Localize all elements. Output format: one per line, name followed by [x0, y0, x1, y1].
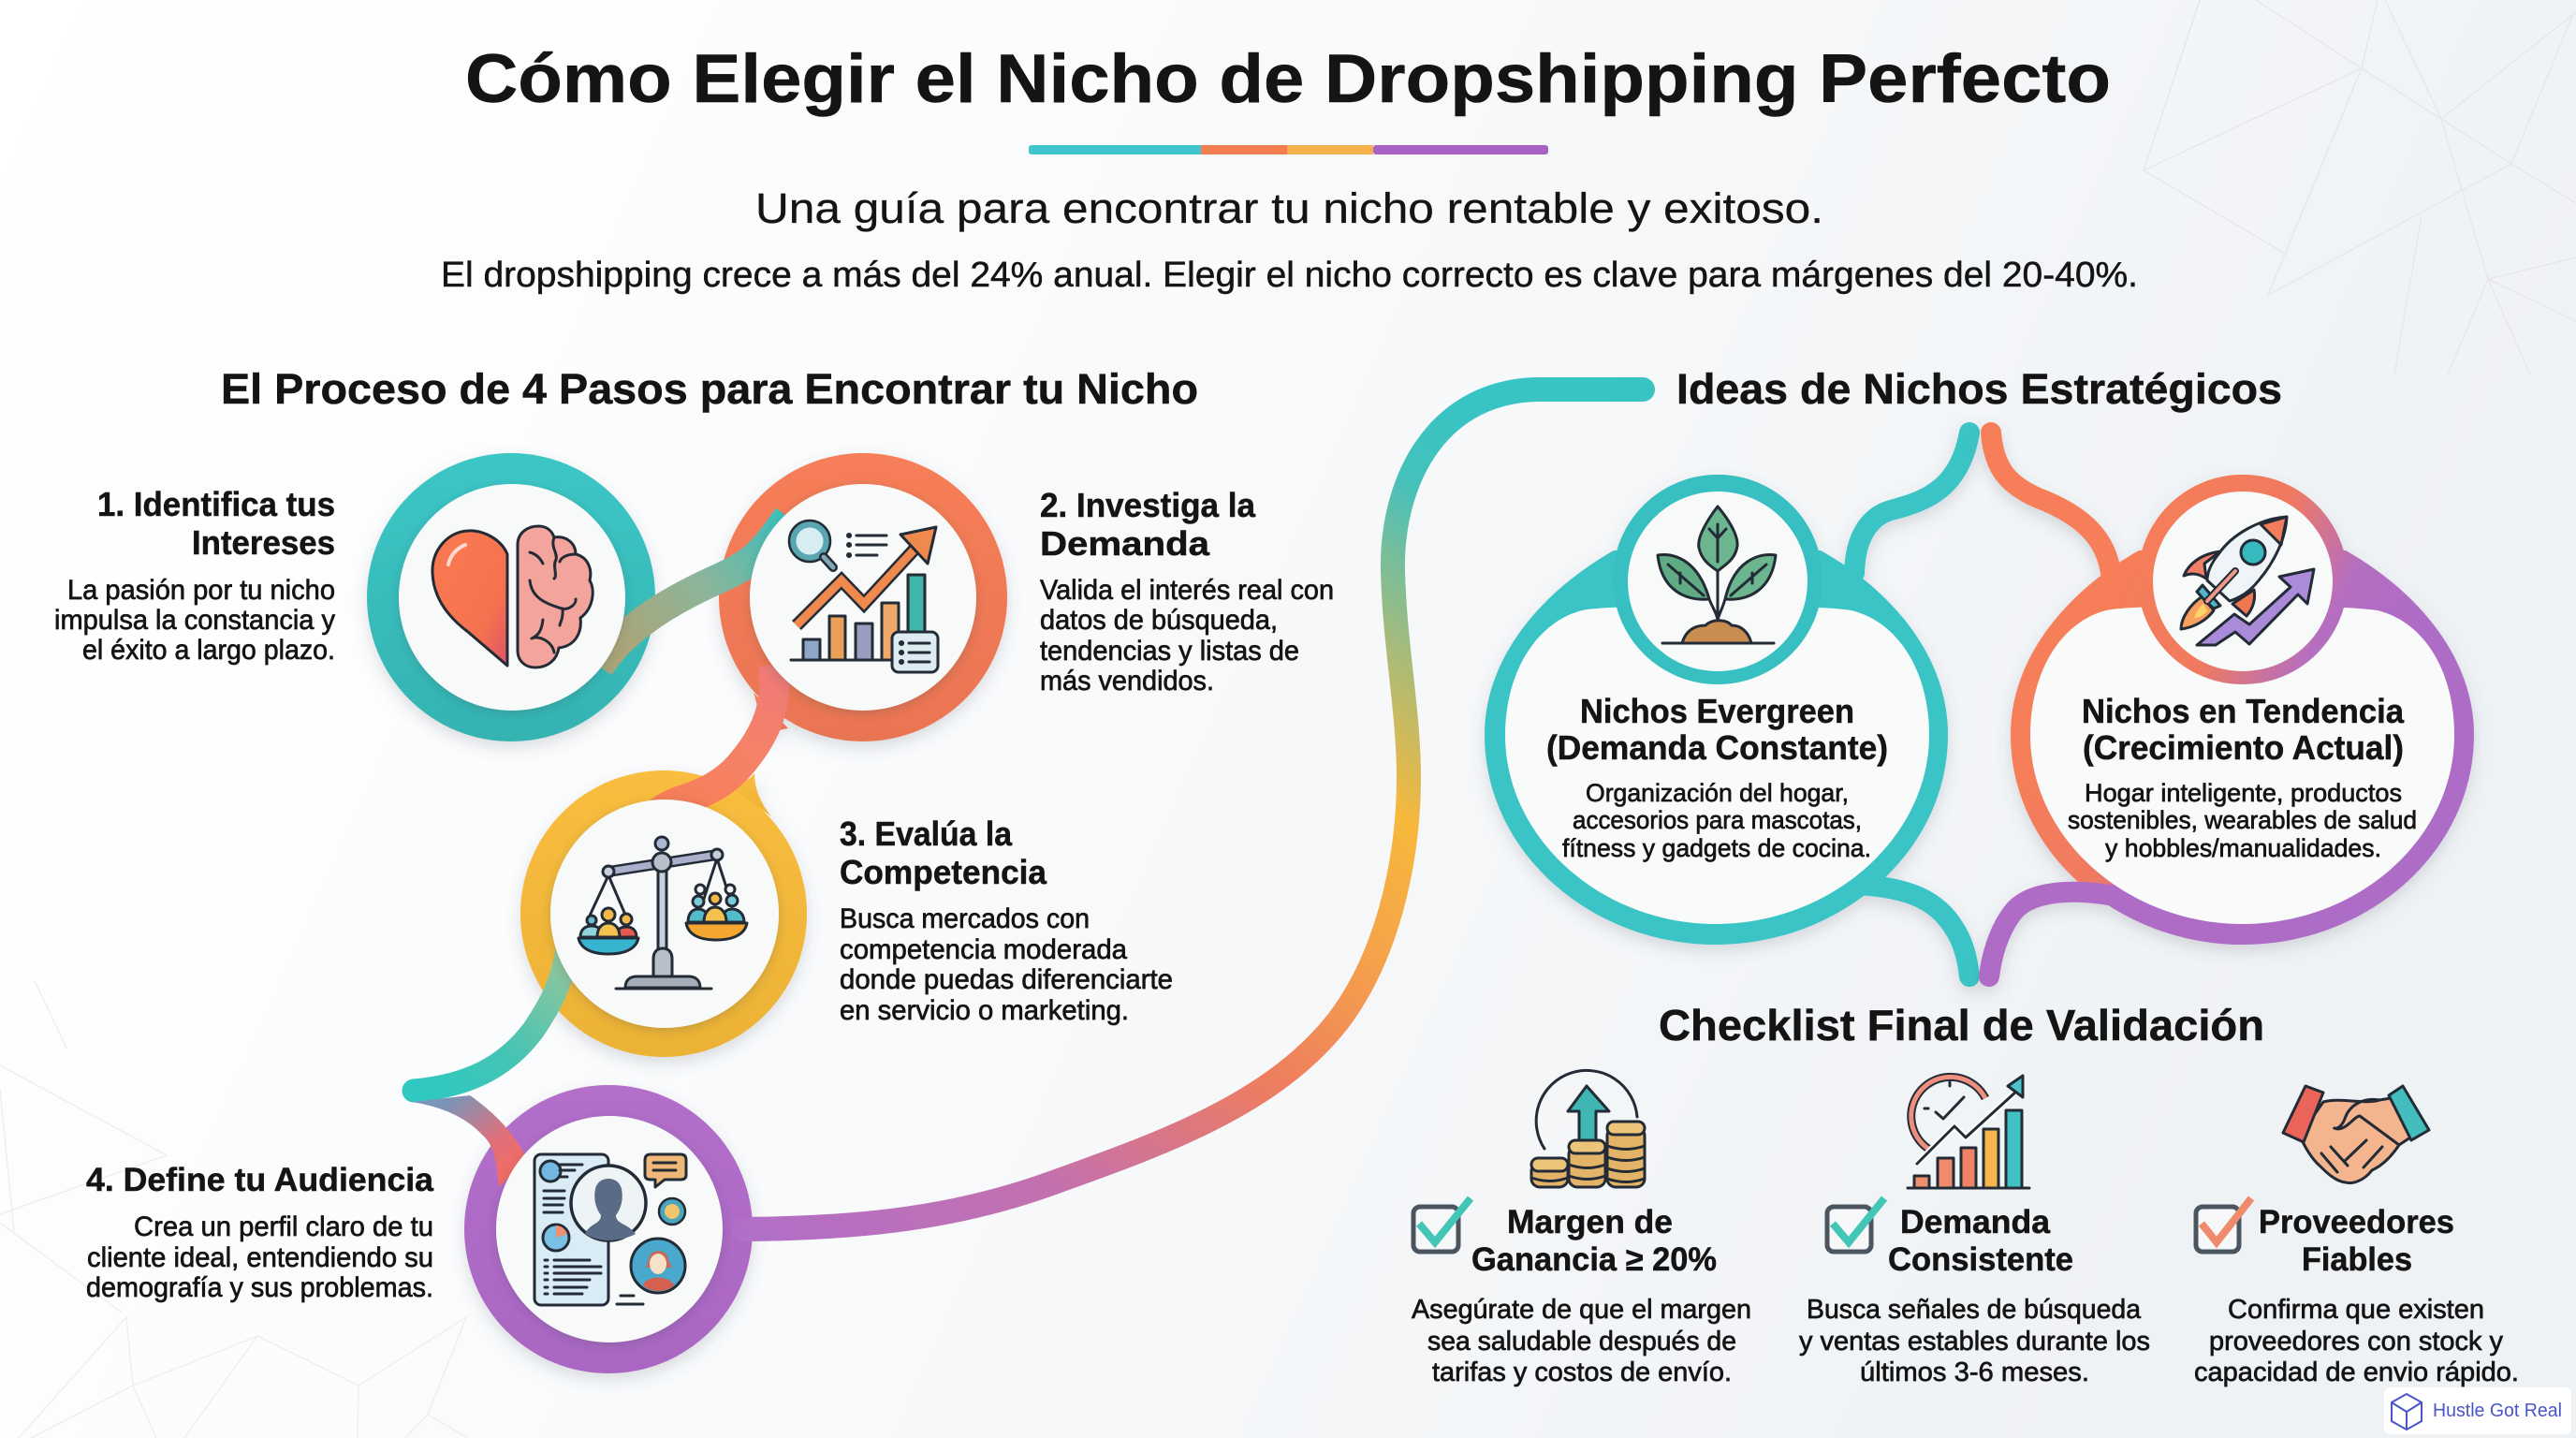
suppliers description [2194, 1295, 2519, 1387]
step 4 description: cliente ideal, entendiendo su [87, 1242, 433, 1273]
step 1 description: impulsa la constancia y [54, 605, 335, 636]
step 2 description: Valida el interés real con [1040, 575, 1334, 606]
suppliers title line 2: Fiables [2302, 1241, 2412, 1278]
icon: customer profile [534, 1154, 686, 1305]
step 1 heading line 2: Intereses [192, 523, 335, 562]
heading: validation checklist: Checklist Final de Validación [1659, 1001, 2264, 1049]
card frame: evergreen [1485, 433, 1969, 976]
margin description: Asegúrate de que el margen [1412, 1295, 1751, 1325]
checkbox: suppliers [2196, 1198, 2251, 1252]
panel: step 3 [550, 800, 1173, 1028]
step rings [367, 453, 1007, 1373]
trending title: Nichos en Tendencia [2082, 692, 2405, 730]
margin description [1412, 1295, 1751, 1387]
step 3 description [840, 903, 1173, 1026]
step 2 description [1040, 575, 1334, 697]
watermark badge [2384, 1387, 2571, 1434]
panel: step 1 [54, 484, 625, 711]
suppliers description: capacidad de envio rápido. [2194, 1357, 2519, 1387]
suppliers title: Proveedores [2259, 1204, 2454, 1240]
evergreen description: accesorios para mascotas, [1573, 806, 1862, 834]
step 1 heading: 1. Identifica tus [97, 485, 335, 523]
subtitle: Una guía para encontrar tu nicho rentable y exitoso. [755, 184, 1823, 232]
margin title line 2: Ganancia ≥ 20% [1471, 1241, 1717, 1278]
card: trending niches [1989, 433, 2474, 976]
panel: step 2 [750, 484, 1334, 711]
demand description: y ventas estables durante los [1799, 1327, 2150, 1357]
checklist item: margin [1412, 1070, 1751, 1387]
step 2 heading: 2. Investiga la [1040, 486, 1256, 524]
evergreen description: fítness y gadgets de cocina. [1562, 834, 1871, 862]
connector: step 3 to 4 [414, 950, 567, 1091]
connector: step 1 to 2 [599, 517, 788, 667]
intro text: El dropshipping crece a más del 24% anual. Elegir el nicho correcto es clave para márgenes del 20-40%. [441, 256, 2138, 295]
step 3 description: Busca mercados con [840, 903, 1090, 934]
heading: process: El Proceso de 4 Pasos para Encontrar tu Nicho [221, 365, 1198, 413]
icon: rocket [2181, 517, 2314, 645]
demand title line 2: Consistente [1888, 1241, 2073, 1278]
demand description [1799, 1295, 2150, 1387]
step 3 description: en servicio o marketing. [840, 995, 1129, 1026]
card: evergreen niches [1485, 433, 1969, 976]
title: Cómo Elegir el Nicho de Dropshipping Perfecto [465, 41, 2111, 117]
checkbox: demand [1827, 1198, 1884, 1252]
suppliers description: proveedores con stock y [2209, 1327, 2503, 1357]
step 4 description: Crea un perfil claro de tu [134, 1211, 433, 1242]
step 4 description [86, 1211, 433, 1303]
step 2 description: tendencias y listas de [1040, 636, 1299, 667]
suppliers description: Confirma que existen [2228, 1295, 2484, 1325]
trending description: y hobbles/manualidades. [2105, 834, 2381, 862]
big swoosh connector to niches [744, 389, 1643, 1229]
step 2 description: más vendidos. [1040, 666, 1214, 697]
step 1 description [54, 575, 335, 666]
evergreen description [1562, 779, 1871, 862]
margin description: tarifas y costos de envío. [1432, 1357, 1732, 1387]
demand title: Demanda [1900, 1204, 2051, 1240]
demand description: últimos 3-6 meses. [1860, 1357, 2089, 1387]
step 4 heading: 4. Define tu Audiencia [86, 1162, 434, 1198]
card frame: trending [1989, 433, 2474, 976]
trending description [2068, 779, 2417, 862]
connector: teal end into step 4 [412, 1095, 527, 1187]
icon: heart and brain [432, 526, 593, 668]
icon: plant [1658, 506, 1776, 643]
evergreen title: Nichos Evergreen [1580, 692, 1854, 730]
evergreen subtitle: (Demanda Constante) [1546, 728, 1888, 767]
margin title: Margen de [1507, 1204, 1673, 1240]
heading: niche ideas: Ideas de Nichos Estratégicos [1676, 365, 2282, 413]
step 2 description: datos de búsqueda, [1040, 605, 1278, 636]
trending description: sostenibles, wearables de salud [2068, 806, 2417, 834]
step 1 description: el éxito a largo plazo. [82, 635, 335, 666]
icon: clock and growth chart [1908, 1076, 2029, 1188]
icon: handshake [2283, 1086, 2429, 1183]
watermark badge: Hustle Got Real [2433, 1401, 2562, 1421]
step 3 description: donde puedas diferenciarte [840, 964, 1173, 995]
checkbox: margin [1413, 1198, 1471, 1252]
icon: balance scale [578, 837, 747, 989]
step 3 heading: 3. Evalúa la [840, 814, 1013, 853]
demand description: Busca señales de búsqueda [1807, 1295, 2142, 1325]
margin description: sea saludable después de [1427, 1327, 1736, 1357]
checklist item: suppliers [2194, 1086, 2519, 1387]
step 3 description: competencia moderada [840, 934, 1127, 965]
connector: step 2 to 3 [646, 665, 774, 829]
step 3 heading line 2: Competencia [840, 853, 1047, 891]
evergreen description: Organización del hogar, [1586, 779, 1849, 807]
checklist item: demand [1799, 1076, 2150, 1387]
icon: demand chart [789, 521, 938, 672]
icon: coins and arrow [1531, 1070, 1645, 1187]
step 4 description: demografía y sus problemas. [86, 1272, 433, 1303]
panel: step 4 [86, 1116, 723, 1343]
step 1 description: La pasión por tu nicho [67, 575, 335, 606]
trending description: Hogar inteligente, productos [2085, 779, 2402, 807]
title underline [1029, 145, 1548, 154]
step 2 heading line 2: Demanda [1040, 524, 1210, 563]
trending subtitle: (Crecimiento Actual) [2083, 728, 2404, 767]
